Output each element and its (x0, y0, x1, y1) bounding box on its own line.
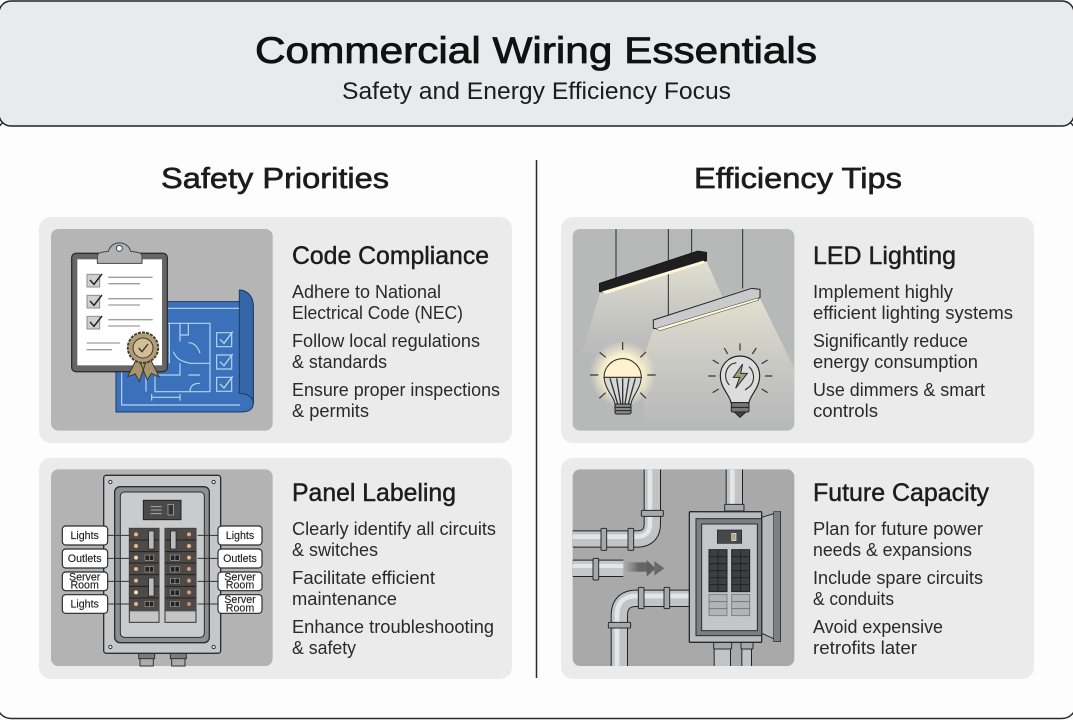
icon: conduits and open panel (573, 469, 794, 666)
subtitle: Safety and Energy Efficiency Focus (342, 78, 731, 105)
icon: labeled breaker panel: Outlets (68, 553, 102, 565)
icon: labeled breaker panel: Outlets (223, 553, 257, 565)
text: Panel Labeling (292, 479, 496, 658)
text: Code Compliance: Follow local regulations (292, 330, 480, 351)
text: Future Capacity: retrofits later (813, 637, 917, 658)
text: Panel Labeling: Facilitate efficient (292, 567, 435, 588)
header banner (0, 1, 1073, 126)
icon: labeled breaker panel: Room (226, 580, 254, 592)
text: LED Lighting (813, 242, 1013, 421)
text: LED Lighting: energy consumption (813, 351, 978, 372)
text: Future Capacity: Avoid expensive (813, 616, 943, 637)
heading: Safety Priorities: Safety Priorities (161, 163, 389, 195)
icon: labeled breaker panel: Lights (226, 530, 254, 542)
text: LED Lighting: Use dimmers & smart (813, 379, 985, 400)
panel: Code Compliance (39, 217, 512, 443)
text: Future Capacity: Plan for future power (813, 518, 983, 539)
icon: labeled breaker panel: Lights (70, 598, 99, 610)
text: Panel Labeling: Enhance troubleshooting (292, 616, 494, 637)
title: Commercial Wiring Essentials (255, 30, 817, 71)
icon: labeled breaker panel: Server (224, 594, 256, 606)
text: Future Capacity: & conduits (813, 588, 894, 609)
text: Code Compliance (292, 242, 500, 421)
text: Code Compliance: & permits (292, 400, 369, 421)
text: LED Lighting: Significantly reduce (813, 330, 968, 351)
text: LED Lighting: controls (813, 400, 878, 421)
panel: Future Capacity (561, 458, 1034, 679)
text: Panel Labeling: & switches (292, 539, 378, 560)
text: Future Capacity: needs & expansions (813, 539, 972, 560)
icon: clipboard and blueprint (51, 229, 273, 431)
text: LED Lighting: LED Lighting (813, 242, 956, 270)
text: Code Compliance: Ensure proper inspections (292, 379, 500, 400)
heading: Efficiency Tips: Efficiency Tips (694, 163, 902, 195)
text: Panel Labeling: & safety (292, 637, 357, 658)
text: Code Compliance: Adhere to National (292, 281, 441, 302)
text: Panel Labeling: Clearly identify all circuits (292, 518, 496, 539)
text: Future Capacity (813, 479, 989, 658)
icon: labeled breaker panel: Server (69, 571, 101, 583)
text: Panel Labeling: Panel Labeling (292, 479, 456, 507)
icon: labeled breaker panel: Room (226, 602, 254, 614)
text: LED Lighting: Implement highly (813, 281, 954, 302)
icon: labeled breaker panel: Server (224, 571, 256, 583)
text: LED Lighting: efficient lighting systems (813, 302, 1013, 323)
text: Code Compliance: Electrical Code (NEC) (292, 302, 463, 323)
text: Code Compliance: & standards (292, 351, 387, 372)
center divider (536, 160, 538, 678)
icon: LED fixtures and bulbs (573, 229, 798, 431)
icon: labeled breaker panel: Room (70, 580, 99, 592)
text: Future Capacity: Include spare circuits (813, 567, 983, 588)
panel: LED Lighting (561, 217, 1034, 443)
text: Code Compliance: Code Compliance (292, 242, 489, 270)
text: Future Capacity: Future Capacity (813, 479, 989, 507)
panel: Panel Labeling (39, 458, 512, 679)
icon: labeled breaker panel: Lights (70, 530, 99, 542)
icon: labeled breaker panel (51, 469, 273, 666)
text: Panel Labeling: maintenance (292, 588, 397, 609)
